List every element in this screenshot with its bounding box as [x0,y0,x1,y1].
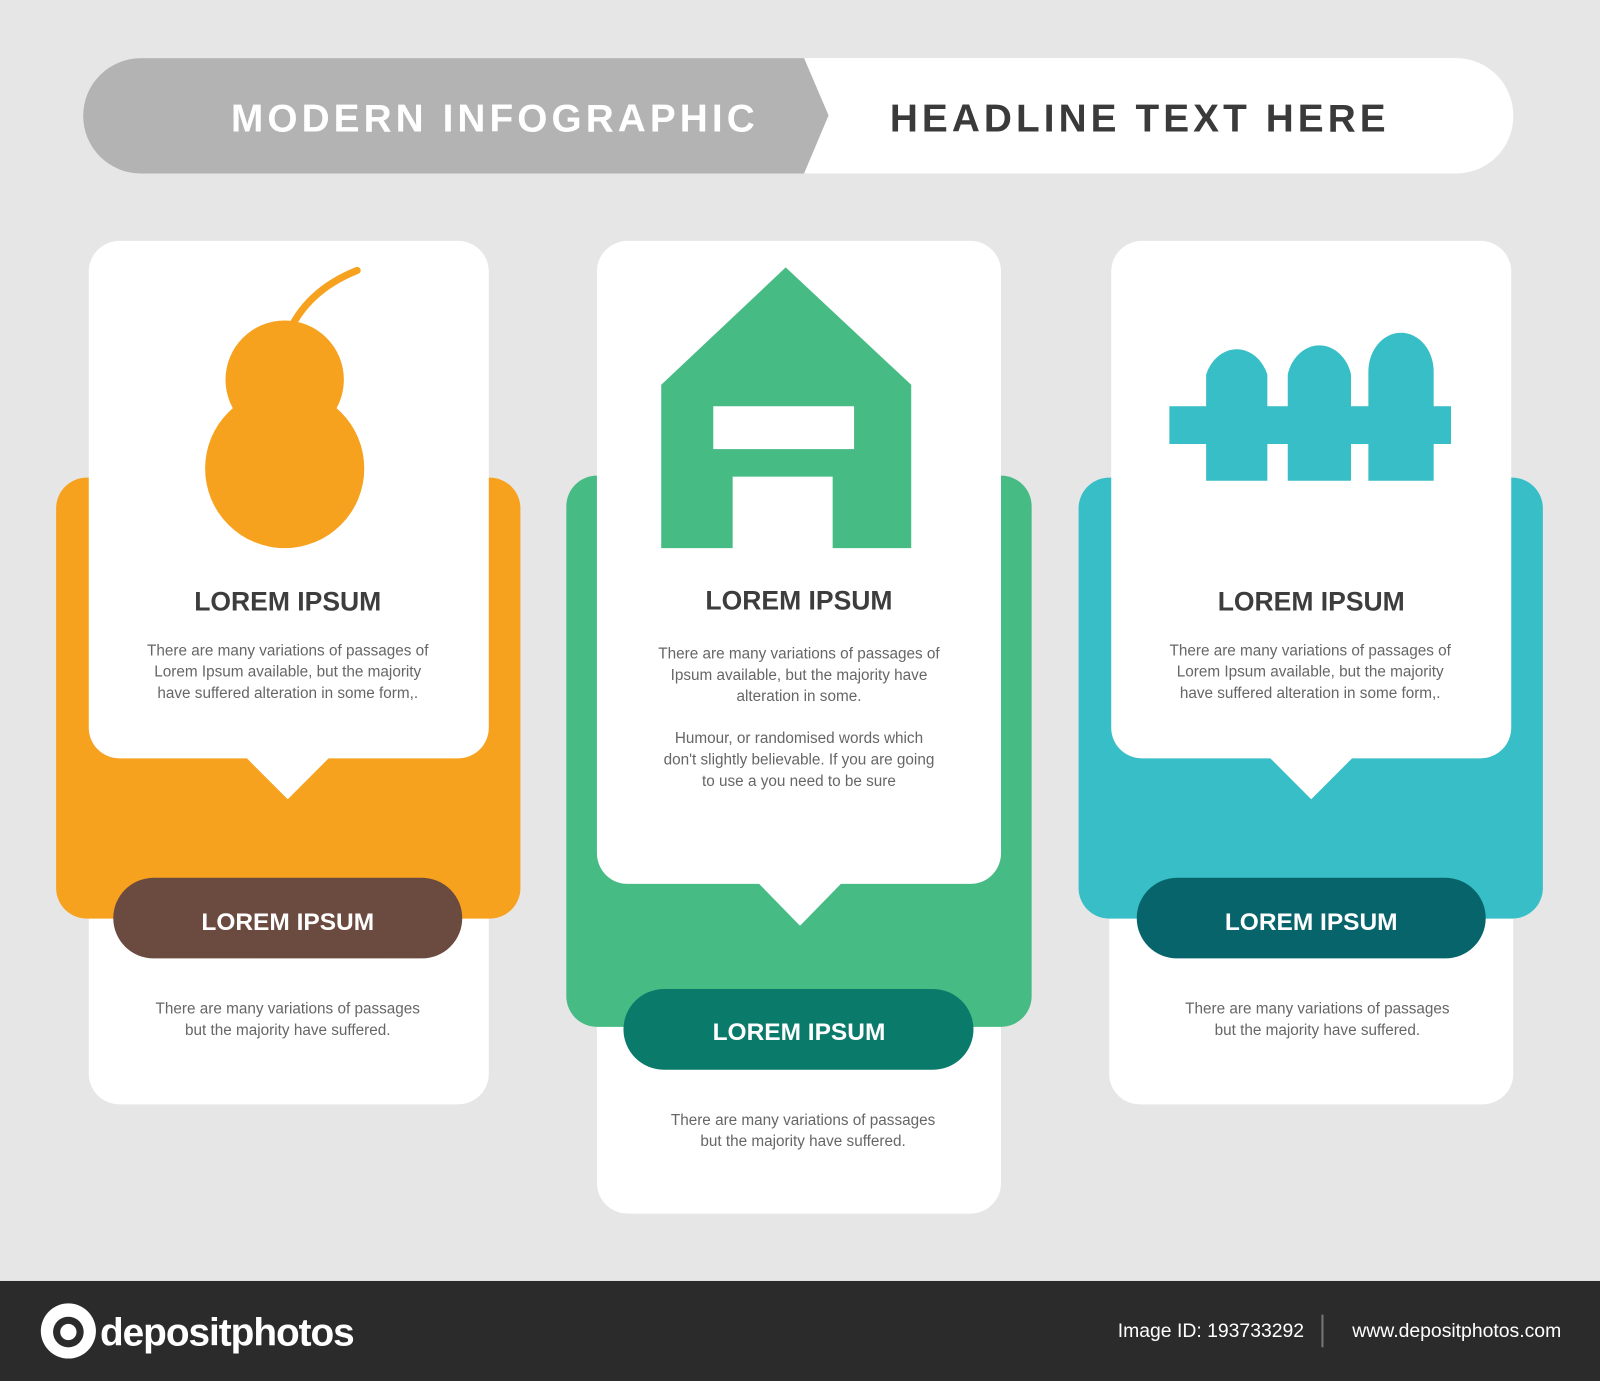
icon: house [661,267,911,548]
bottom text [1185,1001,1450,1039]
bottom text: but the majority have suffered. [700,1133,906,1150]
text block [658,645,940,790]
text block: There are many variations of passages of [658,645,940,662]
text block: have suffered alteration in some form,. [1180,685,1441,702]
title: MODERN INFOGRAPHIC [231,98,759,141]
text block: Ipsum available, but the majority have [671,667,927,684]
text block [1169,642,1452,702]
button [113,878,462,958]
text block: have suffered alteration in some form,. [157,685,418,702]
text block: There are many variations of passages of [147,642,429,659]
heading: LOREM IPSUM [194,586,381,616]
text block: don't slightly believable. If you are going [664,751,934,769]
bottom text: but the majority have suffered. [1215,1022,1420,1039]
bottom text [671,1112,936,1150]
button: LOREM IPSUM [713,1019,885,1046]
icon: fence [1169,333,1451,481]
headline: HEADLINE TEXT HERE [890,98,1390,141]
heading: LOREM IPSUM [1218,586,1405,616]
footer bar: Image ID: 193733292 [1118,1320,1304,1342]
footer bar: www.depositphotos.com [1351,1320,1561,1342]
bottom text: There are many variations of passages [156,1001,420,1018]
panel: right teal [1079,241,1543,1104]
text block: Lorem Ipsum available, but the majority [1177,664,1444,681]
footer bar [0,1281,1600,1381]
panel: left orange [56,241,520,1104]
bottom text: There are many variations of passages [671,1112,936,1129]
text block: to use a you need to be sure [702,773,896,790]
bottom text: but the majority have suffered. [185,1022,390,1039]
heading: LOREM IPSUM [705,585,893,615]
bottom text: There are many variations of passages [1185,1001,1450,1018]
button [1137,878,1486,958]
text block: alteration in some. [736,688,861,705]
icon: camera logo [41,1303,96,1359]
text block: There are many variations of passages of [1169,642,1452,659]
icon: pear [205,270,364,548]
footer bar: depositphotos [100,1311,354,1354]
header banner [83,58,1513,174]
text block: Lorem Ipsum available, but the majority [154,664,422,681]
text block: Humour, or randomised words which [675,730,923,747]
button: LOREM IPSUM [1225,909,1398,936]
button: LOREM IPSUM [201,909,374,936]
button [623,989,973,1070]
text block [147,642,429,702]
panel: middle green [566,241,1032,1214]
bottom text [156,1001,420,1039]
